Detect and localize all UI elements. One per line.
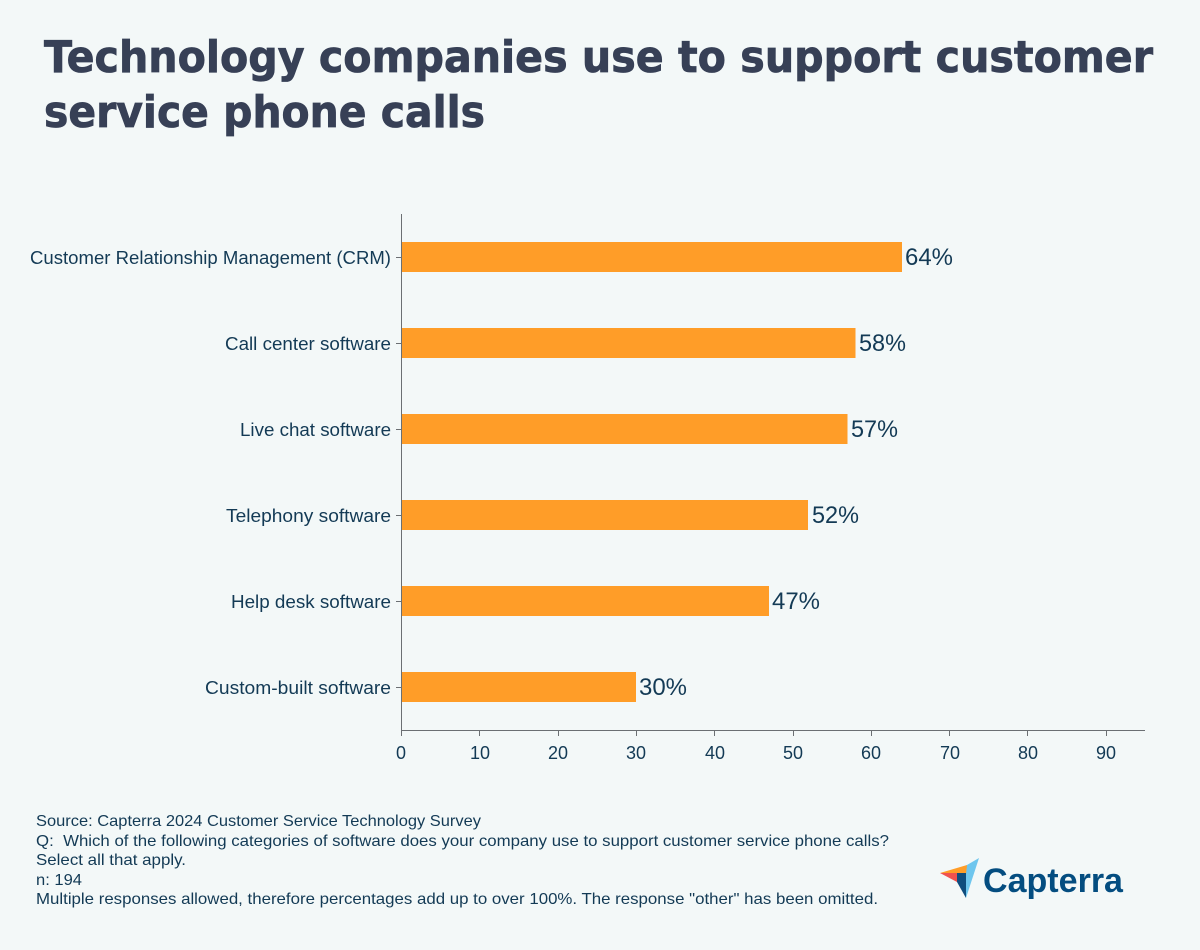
category labels: Live chat software xyxy=(240,420,391,440)
x axis tick labels: 80 xyxy=(1018,743,1038,763)
x axis tick labels: 20 xyxy=(548,743,568,763)
source notes xyxy=(36,813,889,908)
logo wordmark: Capterra xyxy=(983,862,1124,900)
x axis tick labels: 30 xyxy=(626,743,646,763)
x axis xyxy=(401,730,1145,736)
x axis tick labels: 90 xyxy=(1096,743,1116,763)
value labels: 64% xyxy=(905,244,953,271)
icon: logo arrow xyxy=(940,858,979,898)
value labels: 52% xyxy=(812,502,859,529)
Capterra logo xyxy=(940,858,1124,900)
x axis tick labels: 0 xyxy=(396,743,406,763)
source notes: Multiple responses allowed, therefore percentages add up to over 100%. The response "other" has been omitted. xyxy=(36,891,878,908)
value labels xyxy=(639,244,953,701)
category labels: Telephony software xyxy=(226,506,391,526)
source notes: Q: Which of the following categories of software does your company use to support customer service phone calls? xyxy=(36,833,889,850)
value labels: 57% xyxy=(851,416,898,443)
x axis tick labels: 70 xyxy=(940,743,960,763)
x axis tick labels xyxy=(396,743,1116,763)
x axis tick labels: 40 xyxy=(705,743,725,763)
category labels: Call center software xyxy=(225,334,391,354)
x axis tick labels: 10 xyxy=(470,743,490,763)
value labels: 47% xyxy=(772,588,820,615)
category labels xyxy=(30,248,391,698)
bar chart xyxy=(30,214,1145,763)
category labels: Custom-built software xyxy=(205,678,391,698)
title xyxy=(44,32,1153,138)
value labels: 58% xyxy=(859,330,906,357)
category labels: Customer Relationship Management (CRM) xyxy=(30,248,391,268)
value labels: 30% xyxy=(639,674,687,701)
x axis tick labels: 50 xyxy=(783,743,803,763)
source notes: n: 194 xyxy=(36,872,82,889)
category labels: Help desk software xyxy=(231,592,391,612)
bars xyxy=(402,242,902,702)
title: Technology companies use to support customer xyxy=(44,32,1153,83)
source notes: Source: Capterra 2024 Customer Service Technology Survey xyxy=(36,813,481,830)
title: service phone calls xyxy=(44,87,485,138)
x axis tick labels: 60 xyxy=(861,743,881,763)
source notes: Select all that apply. xyxy=(36,852,186,869)
y axis xyxy=(396,214,402,731)
